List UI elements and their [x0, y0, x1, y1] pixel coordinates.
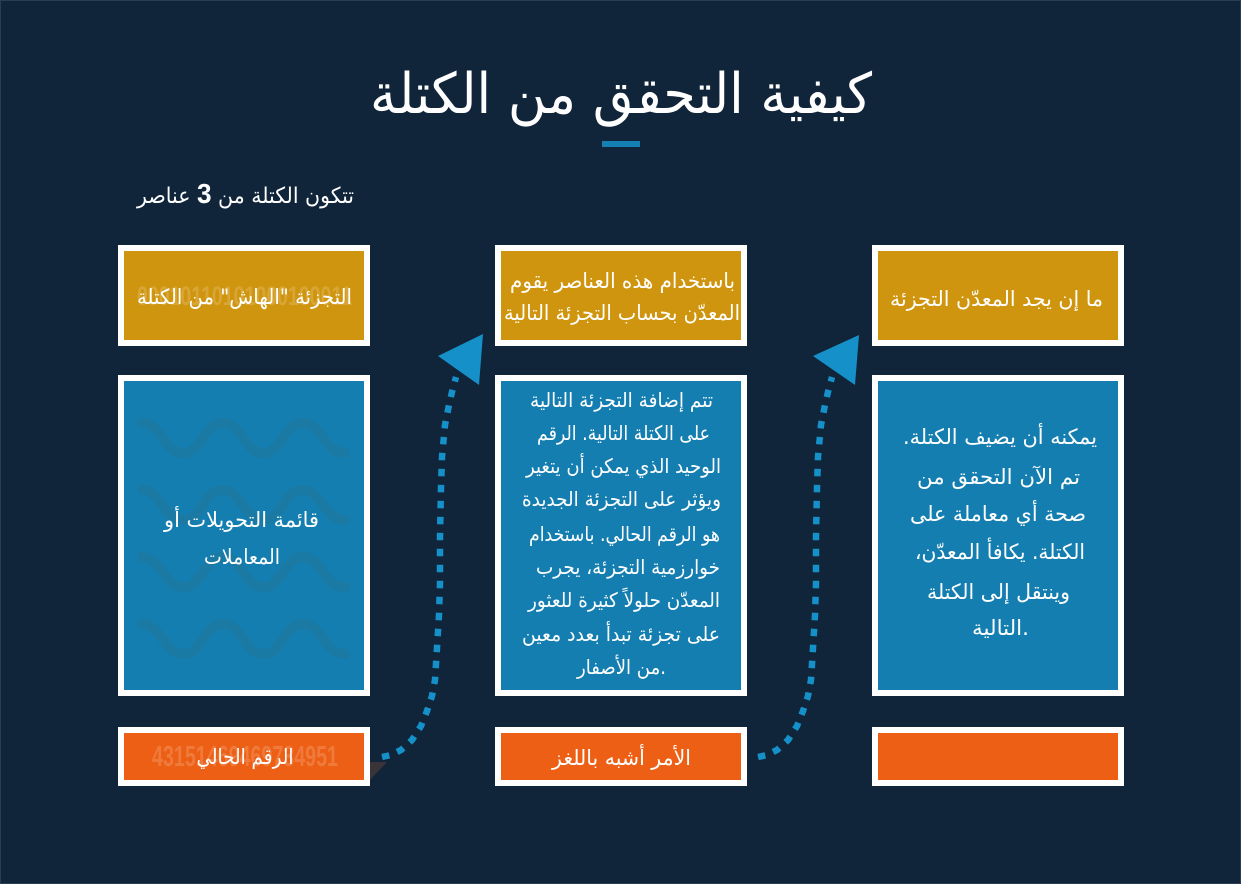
panel: next hash explanation, column 2: الوحيد الذي يمكن أن يتغير [525, 453, 721, 479]
panel: next hash explanation, column 2: على تجزئة تبدأ بعدد معين [522, 621, 720, 646]
panel: next hash explanation, column 2: المعدّن حلولاً كثيرة للعثور [527, 587, 720, 612]
panel: add block explanation, column 3: وينتقل إلى الكتلة [927, 580, 1070, 605]
panel: current number, column 1: الرقم الحالي [196, 745, 294, 770]
panel: hash box, column 1 [118, 245, 370, 346]
panel: add block explanation, column 3 [872, 375, 1124, 696]
panel: add block explanation, column 3: الكتلة. يكافأ المعدّن، [915, 537, 1085, 564]
subtitle: three elements: تتكون الكتلة من 3 عناصر [136, 178, 354, 209]
panel: next hash explanation, column 2: ويؤثر على التجزئة الجديدة [522, 487, 721, 511]
panel: add block explanation, column 3: .التالية [972, 616, 1029, 640]
panel: current number, column 1: 43151469469734951 [152, 741, 338, 773]
wave pattern [142, 423, 345, 654]
panel: add block explanation, column 3: يمكنه أن يضيف الكتلة. [903, 423, 1097, 449]
panel: current number, column 1 [118, 727, 370, 786]
panel: miner finds hash, column 3: ما إن يجد المعدّن التجزئة [890, 287, 1103, 312]
title: كيفية التحقق من الكتلة [370, 62, 872, 127]
panel: miner finds hash, column 3 [872, 245, 1124, 346]
panel: transactions list, column 1 [118, 375, 370, 696]
panel: compute next hash, column 2: باستخدام هذه العناصر يقوم [510, 269, 735, 293]
panel: transactions list, column 1: المعاملات [204, 545, 280, 569]
panel: hash box, column 1: التجزئة "الهاش" من الكتلة [137, 285, 352, 309]
panel: hash box, column 1: 00010110101000100011 [137, 281, 352, 311]
title underline accent [602, 141, 640, 147]
panel: next hash explanation, column 2: على الكتلة التالية. الرقم [537, 421, 710, 445]
panel: transactions list, column 1: قائمة التحويلات أو [163, 506, 319, 532]
panel: puzzle-like, column 2 [495, 727, 747, 786]
shadow corner [370, 762, 387, 780]
arrow: column 1 to column 2 [382, 334, 483, 757]
panel: add block explanation, column 3: تم الآن التحقق من [917, 465, 1080, 490]
panel: empty orange box, column 3 [872, 727, 1124, 786]
panel: add block explanation, column 3: صحة أي معاملة على [910, 500, 1086, 526]
panel: next hash explanation, column 2: هو الرقم الحالي. باستخدام [529, 522, 720, 547]
panel: next hash explanation, column 2: .من الأصفار [576, 655, 666, 679]
arrow: column 2 to column 3 [758, 335, 859, 757]
panel: next hash explanation, column 2 [495, 375, 747, 696]
panel: next hash explanation, column 2: تتم إضافة التجزئة التالية [530, 388, 713, 413]
panel: compute next hash, column 2: المعدّن بحساب التجزئة التالية [504, 301, 740, 325]
panel: puzzle-like, column 2: الأمر أشبه باللغز [551, 744, 691, 770]
panel: compute next hash, column 2 [495, 245, 747, 346]
panel: next hash explanation, column 2: خوارزمية التجزئة، يجرب [536, 555, 720, 579]
